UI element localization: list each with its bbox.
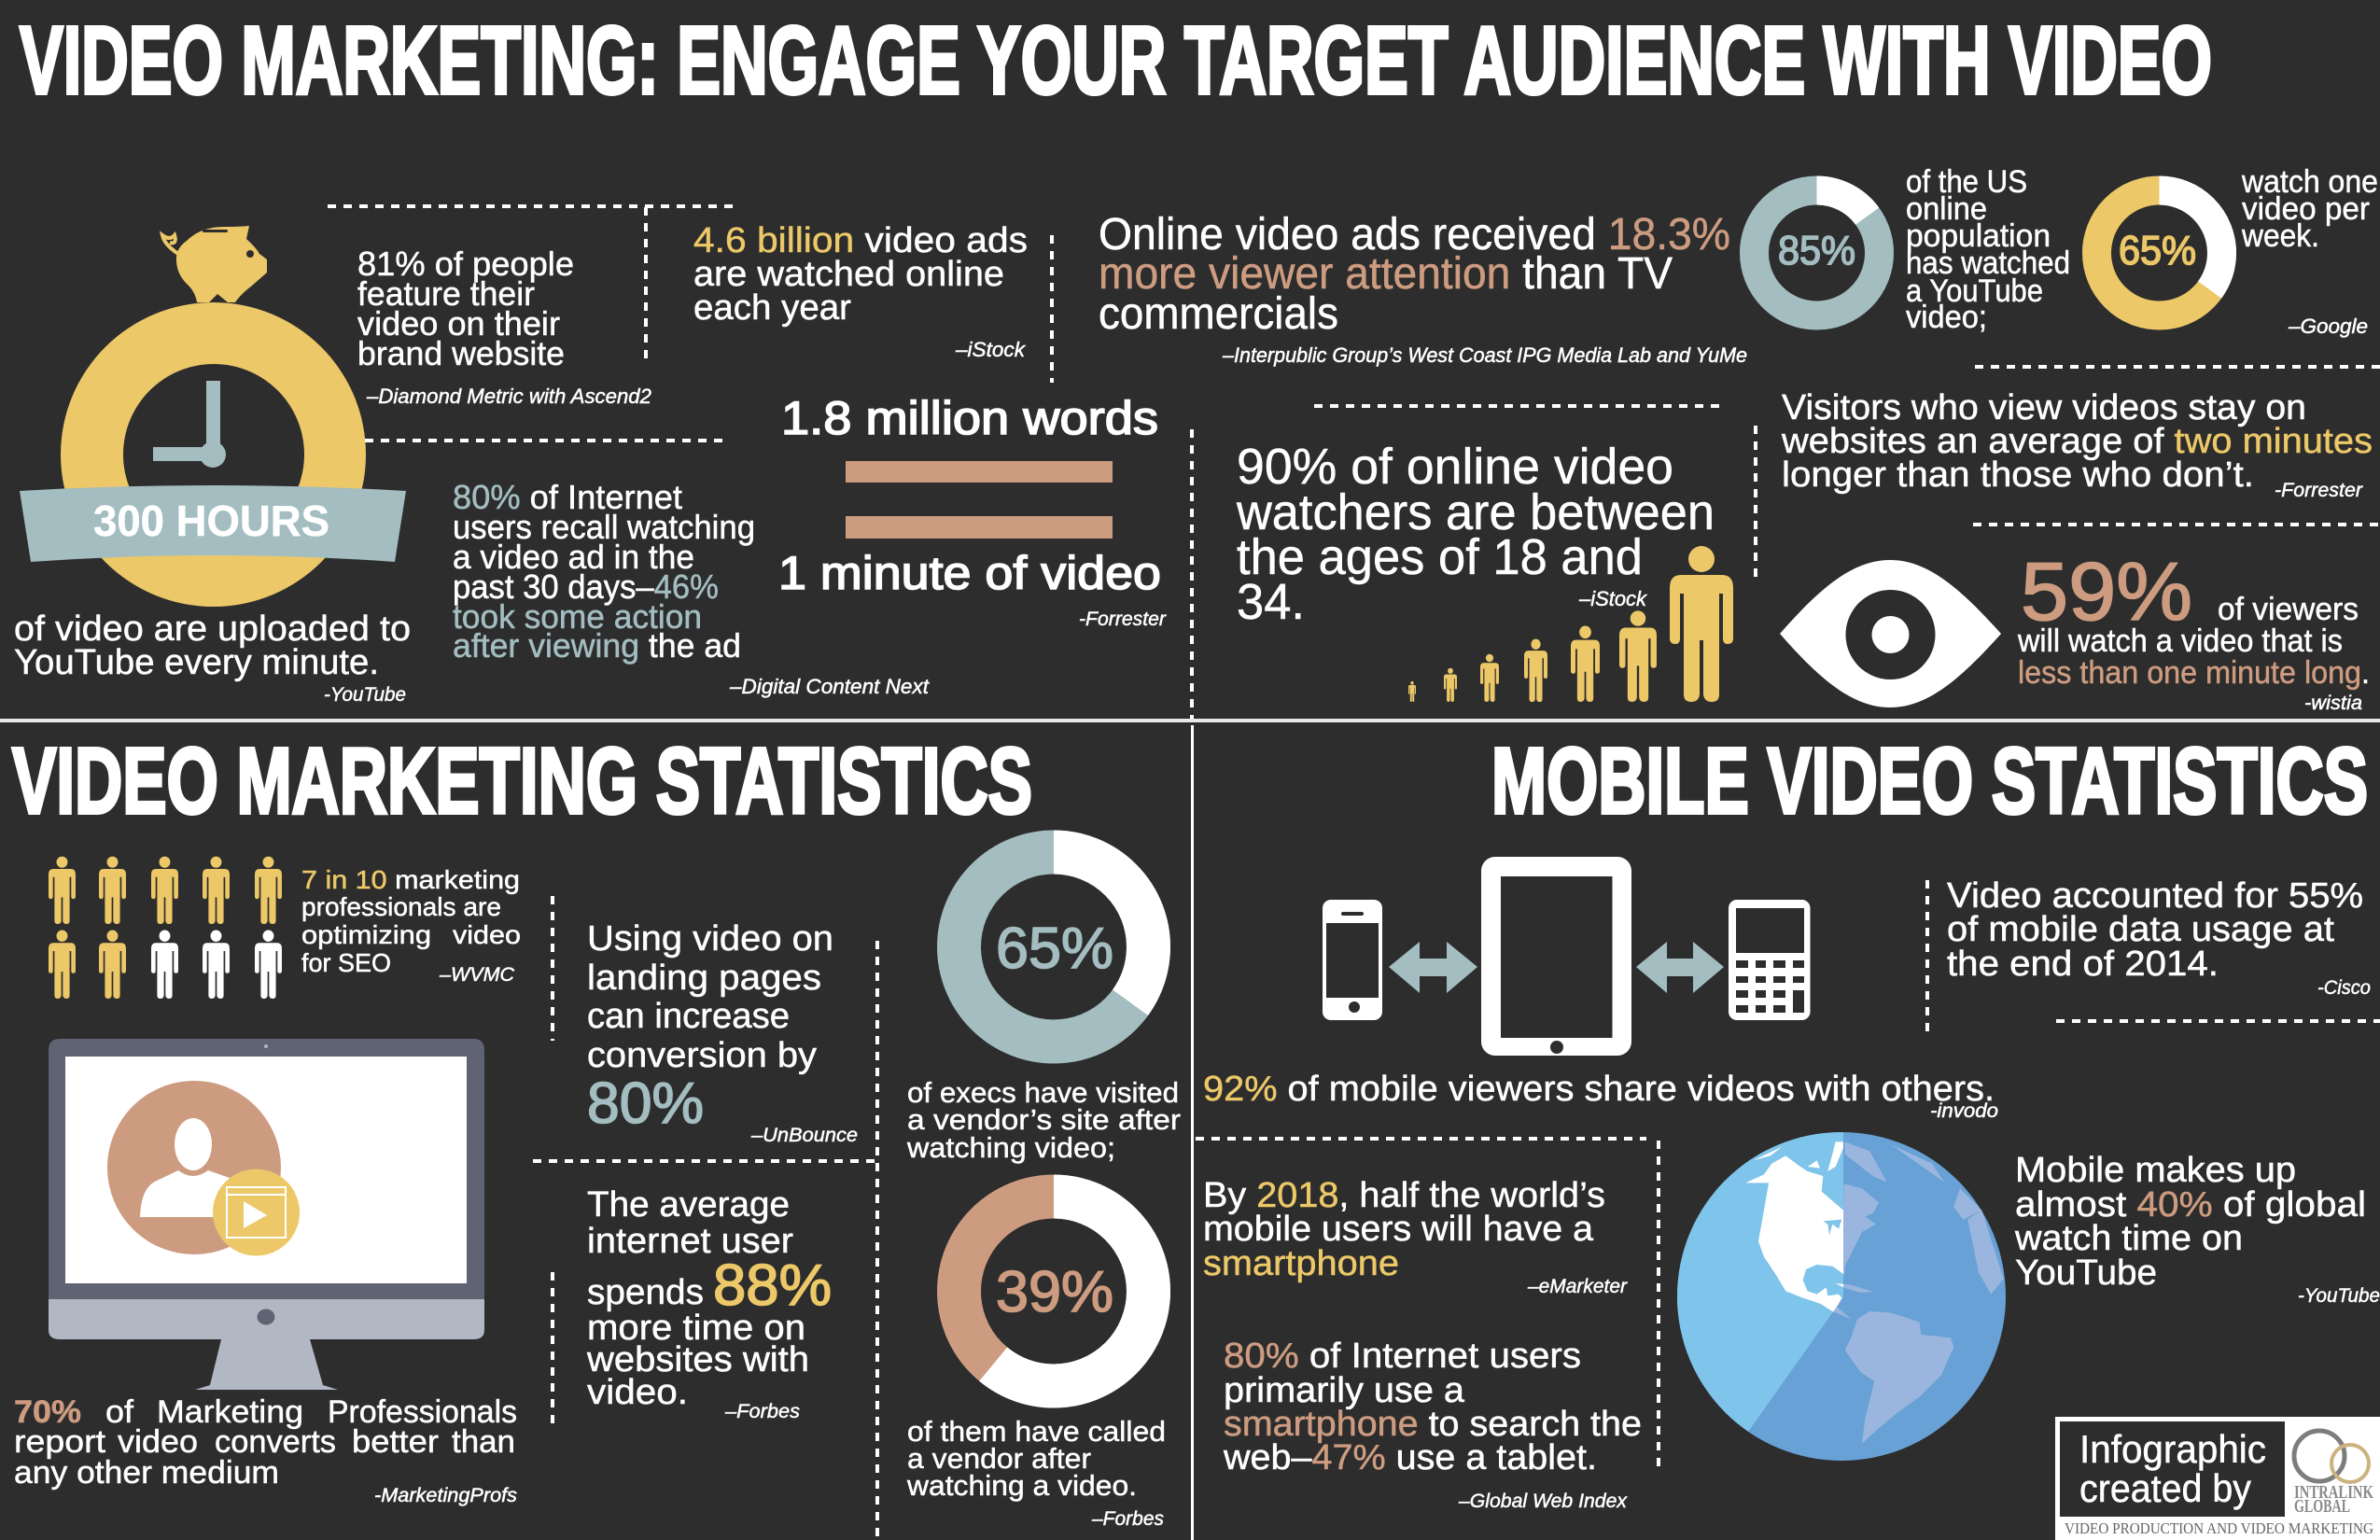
text: vendor caption: –Forbes [1091,1508,1164,1530]
text: 88% stat: internet user [587,1222,793,1261]
text: landing pages stat: can increase [587,997,790,1036]
text: 70% stat: any other medium [14,1455,279,1491]
text: landing pages stat: 80% [587,1071,704,1136]
text: 55% stat: Video accounted for 55% [1947,876,2363,916]
text: execs caption: a vendor’s site after [907,1103,1181,1136]
text: 2018 stat: –eMarketer [1527,1276,1628,1297]
text: 2018 stat: smartphone [1203,1244,1399,1283]
text: 80% smartphone stat: smartphone to search the [1224,1405,1642,1444]
icon: piggy bank [162,226,267,302]
icon: growing people [1408,546,1733,702]
text: youtube stat: video; [1906,300,1987,335]
text: 55% stat: of mobile data usage at [1947,910,2334,949]
logo: Intralink Global: GLOBAL [2294,1496,2350,1517]
text: youtube stat: has watched [1906,245,2070,281]
text: 40% stat: YouTube [2015,1253,2157,1293]
text: 70% stat: -MarketingProfs [374,1485,518,1506]
text: 80% stat: past 30 days–46% [453,567,719,606]
text: 300 hours caption: of video are uploaded to [14,609,411,649]
text: vendor caption: a vendor after [907,1442,1091,1475]
credit box: created by [2079,1466,2251,1510]
text: youtube stat: online [1906,191,1987,227]
text: 80% smartphone stat: web–47% use a tablet. [1223,1438,1597,1477]
text: 80% smartphone stat: primarily use a [1224,1371,1465,1410]
text: 55% stat: -Cisco [2317,977,2371,999]
text: 300 hours caption [14,609,411,706]
text: landing pages stat: –UnBounce [750,1125,858,1146]
text: 2018 stat: By 2018, half the world’s [1203,1176,1605,1215]
graphic: 1.8 million words equals 1 minute of video: 1.8 million words [781,392,1158,444]
text: 40% stat [2014,1151,2380,1307]
chart: donut 39%: 39% [996,1260,1113,1324]
text: two minutes stat: websites an average of two minutes [1781,422,2373,461]
text: 70% stat: of [105,1394,134,1430]
text: 59% stat [2017,545,2370,714]
text: landing pages stat [587,919,858,1146]
text: 18.3% stat: Online video ads received 18.3% [1099,210,1730,259]
text: 80% stat: after viewing the ad [453,626,741,665]
text: 4.6 billion stat: each year [693,288,851,328]
text: 88% stat: 88% [713,1253,832,1318]
text: 18.3% stat [1099,210,1747,367]
text: 90% stat: –iStock [1578,587,1647,610]
icon: globe [1677,1132,2006,1461]
text: 59% stat: -wistia [2304,693,2362,714]
text: 90% stat: 90% of online video [1237,439,1673,495]
text: two minutes stat [1781,388,2373,501]
text: 7 in 10 stat [301,865,521,986]
text: 4.6 billion stat [693,221,1028,361]
text: youtube stat: population [1906,218,2051,254]
section dividers [0,429,2380,1540]
text: 59% stat: less than one minute long. [2018,655,2370,691]
text: 59% stat: of viewers [2218,592,2359,627]
text: 88% stat: video. [587,1373,688,1412]
text: execs caption: watching video; [906,1131,1115,1164]
text: two minutes stat: -Forrester [2275,480,2363,501]
text: 7 in 10 stat: 7 in 10 marketing [301,865,520,894]
text: 2018 stat [1203,1176,1628,1297]
text: 55% stat: the end of 2014. [1947,945,2219,984]
text: 81% stat: video on their [357,304,560,343]
text: 70% stat: Professionals [328,1394,517,1430]
heading: video marketing statistics: VIDEO MARKETING STATISTICS [12,729,1032,833]
text: 80% stat: users recall watching [453,508,755,546]
logo: Intralink Global [2294,1431,2373,1517]
chart: donut 65% execs [959,852,1148,1042]
chart: donut 65% small: 65% [2119,228,2196,273]
icon: clock with banner [20,302,406,607]
dashed dividers lower right [1196,880,2380,1470]
dashed dividers top right [1314,367,2380,583]
chart: donut 39% [959,1197,1148,1386]
text: 80% stat: took some action [453,597,702,636]
text: 70% stat: video [118,1424,198,1460]
text: 7 in 10 stat: for SEO [301,948,391,977]
text: 70% stat: Marketing [157,1394,303,1430]
icon: eye [1780,560,2001,707]
text: 80% smartphone stat [1223,1337,1642,1512]
text: 88% stat: The average [587,1185,790,1225]
text: one video per week: week. [2241,218,2319,254]
icon: smartphone [1323,900,1382,1020]
banner text: 300 HOURS [93,497,329,545]
text: 88% stat: websites with [586,1340,809,1379]
text: 90% stat: the ages of 18 and [1237,529,1643,585]
dashed dividers top left [328,206,1052,441]
text: 90% stat: watchers are between [1236,484,1715,540]
text: 7 in 10 stat: optimizing [301,920,431,949]
text: 7 in 10 stat: video [453,920,521,949]
text: 90% stat [1236,439,1715,630]
text: 80% smartphone stat: –Global Web Index [1458,1491,1629,1512]
text: 59% stat: 59% [2021,545,2192,637]
text: 80% smartphone stat: 80% of Internet users [1224,1337,1581,1376]
text: 4.6 billion stat: –iStock [955,338,1026,361]
text: vendor caption: of them have called [907,1415,1166,1448]
text: 18.3% stat: commercials [1099,289,1338,339]
credit box: Infographic [2079,1427,2266,1471]
text: 81% stat: brand website [357,334,565,372]
text: 81% stat [357,245,651,408]
text: 81% stat: –Diamond Metric with Ascend2 [366,385,651,408]
text: 70% stat: than [452,1424,515,1460]
text: 80% stat: 80% of Internet [453,478,682,516]
credit box [2055,1417,2380,1540]
text: 70% stat: report [14,1424,106,1460]
text: 40% stat: almost 40% of global [2015,1185,2366,1225]
text: one video per week: –Google [2288,315,2368,338]
icon: 7 in 10 people [49,857,282,999]
text: 92% stat: -invodo [1930,1100,1998,1122]
text: 70% stat: converts [215,1424,336,1460]
icon: desktop monitor with video avatar [49,1039,484,1390]
text: 88% stat [586,1185,832,1422]
graphic: 1.8 million words equals 1 minute of video: -Forrester [1079,609,1167,630]
text: 55% stat [1947,876,2371,999]
text: 88% stat: spends [587,1273,704,1312]
text: 70% stat: better [352,1424,439,1460]
text: 81% stat: 81% of people [357,245,574,283]
text: 88% stat: –Forbes [724,1401,801,1422]
text: execs caption [906,1076,1181,1164]
text: 80% stat: a video ad in the [453,538,694,576]
text: 81% stat: feature their [357,274,535,313]
text: 40% stat: Mobile makes up [2015,1151,2296,1190]
chart: donut 65% execs: 65% [996,917,1113,981]
arrow: tablet to feature phone [1636,942,1724,993]
text: 300 hours caption: -YouTube [324,684,406,706]
chart: donut 85%: 85% [1778,228,1855,273]
text: youtube stat [1906,164,2070,335]
text: 70% stat [14,1394,518,1506]
text: youtube stat: a YouTube [1906,273,2043,309]
text: 7 in 10 stat: –WVMC [439,964,515,986]
text: 300 hours caption: YouTube every minute. [14,643,379,682]
text: execs caption: of execs have visited [907,1076,1179,1109]
text: vendor caption [906,1415,1166,1530]
dashed dividers lower left [533,896,877,1540]
chart: donut 85% [1755,190,1880,315]
text: one video per week [2241,164,2378,338]
text: 92% stat: 92% of mobile viewers share videos with others. [1203,1070,1995,1109]
icon: tablet [1481,857,1631,1056]
text: 90% stat: 34. [1237,574,1305,630]
text: one video per week: video per [2242,191,2370,227]
text: youtube stat: of the US [1906,164,2027,200]
text: 59% stat: will watch a video that is [2017,623,2343,659]
text: 80% stat: –Digital Content Next [729,675,930,698]
text: two minutes stat: Visitors who view videos stay on [1782,388,2306,427]
text: 18.3% stat: more viewer attention than TV [1099,249,1673,299]
text: 80% stat [453,478,930,698]
text: landing pages stat: conversion by [587,1036,817,1075]
text: 2018 stat: mobile users will have a [1203,1210,1594,1249]
text: 88% stat: more time on [587,1309,805,1348]
chart: donut 65% small [2096,190,2221,315]
text: two minutes stat: longer than those who don’t. [1782,455,2254,495]
text: 7 in 10 stat: professionals are [301,892,501,921]
text: 18.3% stat: –Interpublic Group’s West Coast IPG Media Lab and YuMe [1222,343,1747,367]
text: landing pages stat: Using video on [587,919,833,959]
text: 4.6 billion stat: 4.6 billion video ads [693,221,1028,260]
graphic: 1.8 million words equals 1 minute of video [778,392,1167,630]
text: vendor caption: watching a video. [906,1469,1137,1502]
text: 70% stat: 70% [14,1394,81,1430]
graphic: 1.8 million words equals 1 minute of video: 1 minute of video [778,547,1161,599]
text: landing pages stat: landing pages [587,959,821,998]
text: 4.6 billion stat: are watched online [693,255,1004,294]
icon: keypad phone [1729,900,1811,1020]
text: 40% stat: -YouTube [2298,1285,2380,1307]
arrow: phone to tablet [1389,942,1477,993]
text: 40% stat: watch time on [2014,1219,2243,1258]
